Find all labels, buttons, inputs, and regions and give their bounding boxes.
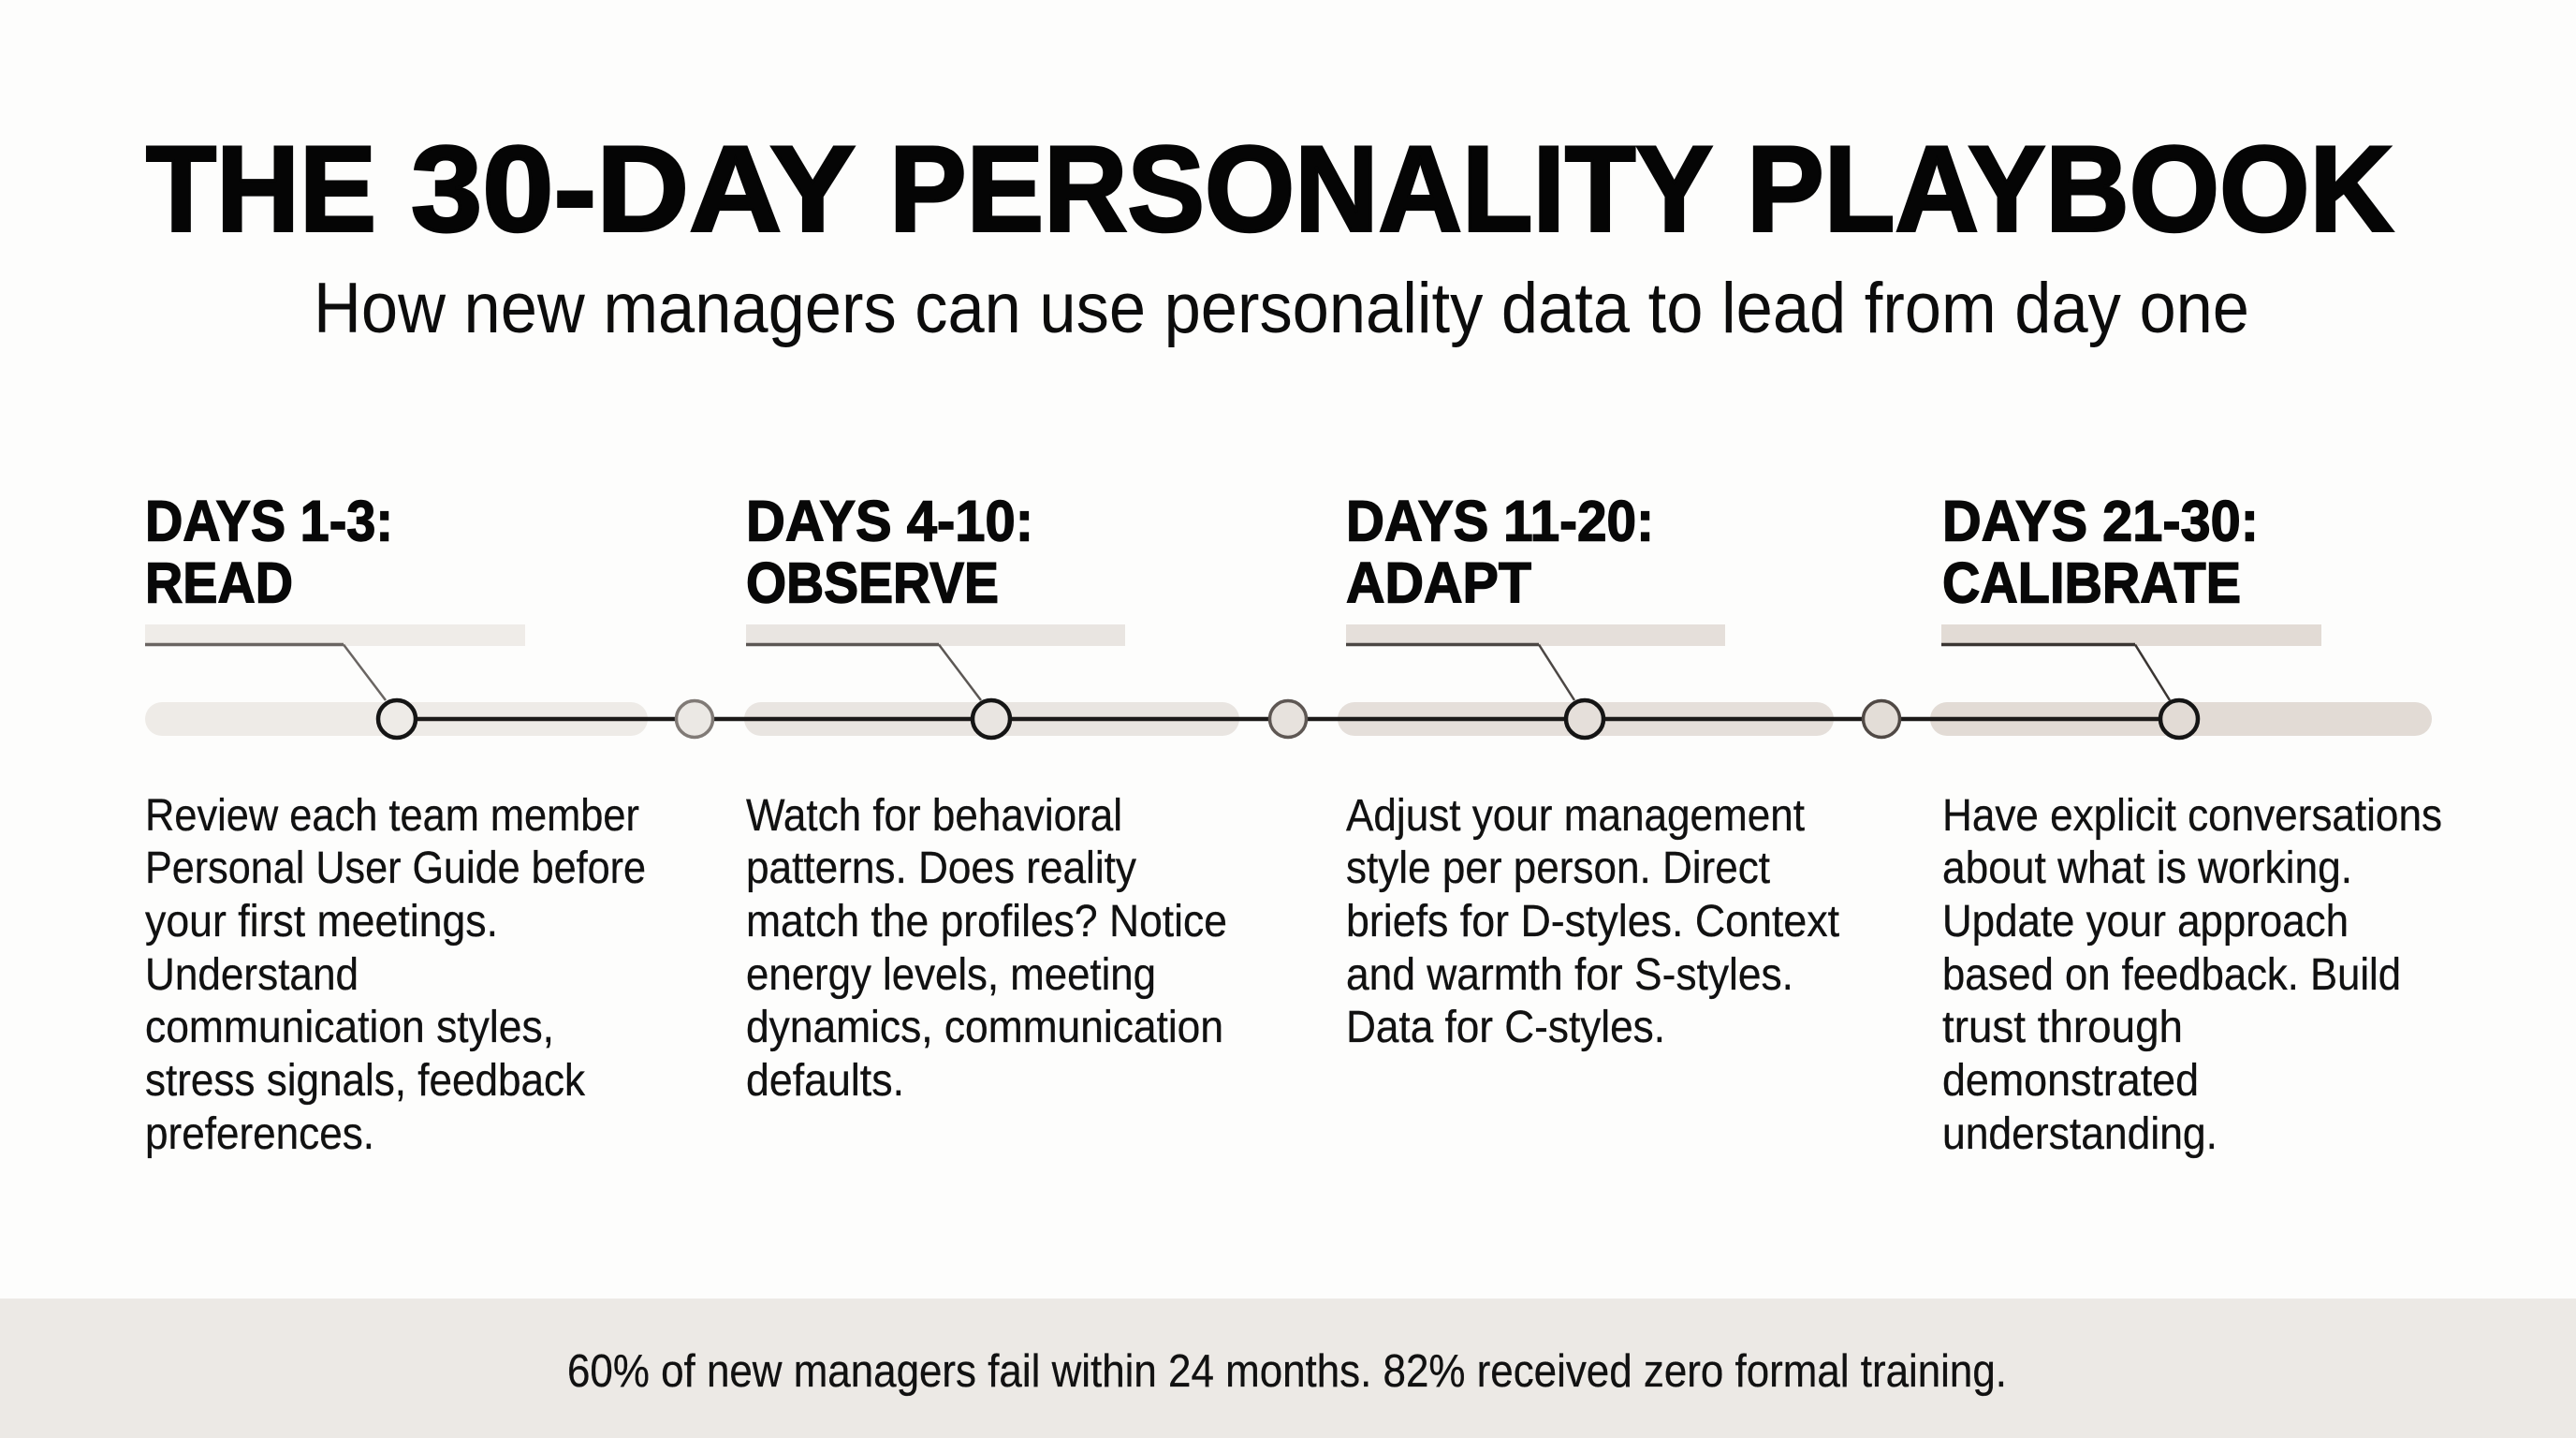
heading: days 21-30: CALIBRATE — [1942, 550, 2241, 614]
phase node: observe — [973, 700, 1010, 738]
body text: communication styles, — [145, 1002, 554, 1052]
heading: days 4-10: DAYS 4-10: — [746, 489, 1033, 552]
heading: days 1-3 — [145, 489, 393, 614]
body text: briefs for D-styles. Context — [1346, 896, 1839, 946]
title: PERSONALITY — [889, 120, 1713, 257]
body text: patterns. Does reality — [746, 843, 1137, 893]
body text — [145, 790, 646, 1159]
heading: days 4-10 — [746, 489, 1033, 614]
connector to node — [1941, 644, 2170, 700]
transition node 1 — [676, 700, 713, 738]
body text: and warmth for S-styles. — [1346, 949, 1793, 1000]
body text — [1346, 790, 1839, 1052]
heading: days 11-20: ADAPT — [1346, 550, 1531, 614]
body text: trust through — [1942, 1002, 2183, 1052]
body text — [746, 790, 1227, 1106]
body text: stress signals, feedback — [145, 1055, 586, 1106]
footer band — [0, 1299, 2576, 1438]
body text: dynamics, communication — [746, 1002, 1223, 1052]
body text: Update your approach — [1942, 896, 2349, 946]
body text: defaults. — [746, 1055, 904, 1106]
body text: based on feedback. Build — [1942, 949, 2401, 1000]
timeline track: days 4-10 — [744, 702, 1239, 736]
phase node: calibrate — [2160, 700, 2198, 738]
heading: days 1-3: READ — [145, 550, 293, 614]
panel: days 21-30 calibrate — [1941, 489, 2442, 1159]
body text: Watch for behavioral — [746, 790, 1122, 841]
heading: days 21-30 — [1942, 489, 2259, 614]
body text: Review each team member — [145, 790, 639, 841]
title: 30-DAY — [411, 120, 856, 257]
panel: days 1-3 read — [145, 489, 646, 1159]
heading: days 11-20: DAYS 11-20: — [1346, 489, 1654, 552]
body text: about what is working. — [1942, 843, 2352, 893]
body text: understanding. — [1942, 1108, 2217, 1159]
heading: days 21-30: DAYS 21-30: — [1942, 489, 2259, 552]
body text: Understand — [145, 949, 359, 1000]
label bar — [1346, 624, 1725, 646]
heading: days 1-3: DAYS 1-3: — [145, 489, 393, 552]
subtitle: How new managers can use personality data to lead from day one — [314, 269, 2249, 348]
phase node: read — [378, 700, 416, 738]
label bar — [1941, 624, 2321, 646]
title: PLAYBOOK — [1747, 120, 2393, 257]
timeline track: days 11-20 — [1338, 702, 1834, 736]
connector to node — [145, 644, 386, 700]
body text: Personal User Guide before — [145, 843, 646, 893]
footer statistic: 60% of new managers fail within 24 months. 82% received zero formal training. — [567, 1346, 2007, 1397]
body text: match the profiles? Notice — [746, 896, 1227, 946]
body text: preferences. — [145, 1108, 374, 1159]
body text: energy levels, meeting — [746, 949, 1156, 1000]
body text — [1942, 790, 2442, 1159]
body text: Data for C-styles. — [1346, 1002, 1665, 1052]
label bar — [746, 624, 1125, 646]
label bar — [145, 624, 525, 646]
phase node: adapt — [1566, 700, 1603, 738]
body text: Have explicit conversations — [1942, 790, 2442, 841]
transition node 3 — [1863, 700, 1900, 738]
progress line — [397, 717, 2179, 721]
heading: days 11-20 — [1346, 489, 1654, 614]
connector to node — [746, 644, 981, 700]
panel: days 11-20 adapt — [1346, 489, 1839, 1052]
timeline track: days 1-3 — [145, 702, 648, 736]
body text: Adjust your management — [1346, 790, 1805, 841]
body text: demonstrated — [1942, 1055, 2199, 1106]
title: THE — [146, 120, 376, 257]
body text: style per person. Direct — [1346, 843, 1770, 893]
timeline track: days 21-30 — [1930, 702, 2432, 736]
heading: days 4-10: OBSERVE — [746, 550, 999, 614]
timeline — [145, 700, 2432, 738]
transition node 2 — [1269, 700, 1307, 738]
panel: days 4-10 observe — [746, 489, 1227, 1106]
connector to node — [1346, 644, 1574, 700]
body text: your first meetings. — [145, 896, 498, 946]
title — [146, 120, 2393, 257]
